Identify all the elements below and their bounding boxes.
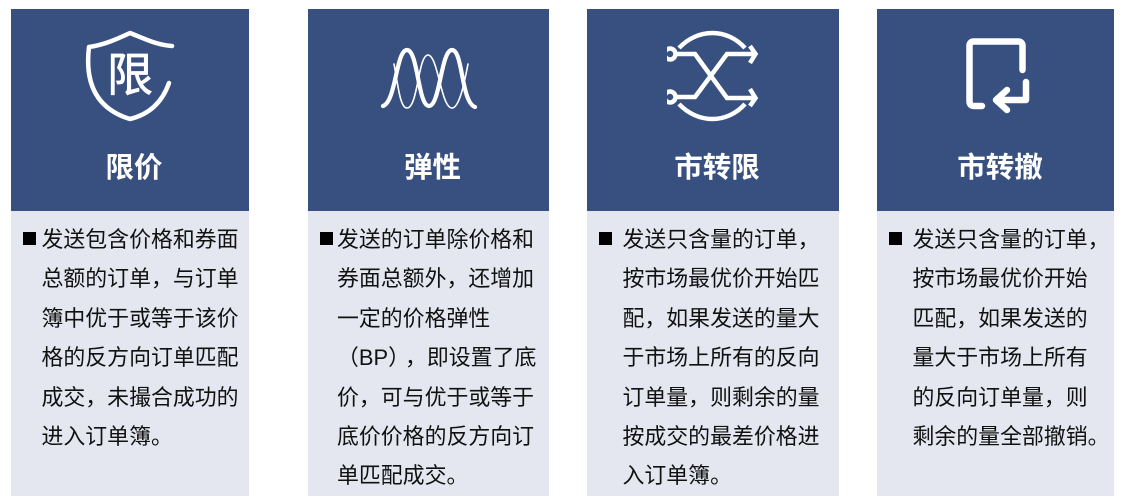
description: 弹性: （BP），即设置了底 [337, 345, 536, 370]
description: 市转撤: 剩余的量全部撤销。 [912, 424, 1110, 449]
description: 限价: 簿中优于或等于该价 [42, 306, 239, 331]
panel: 市转撤 [877, 9, 1114, 496]
heading: 市转撤: 市转撤 [957, 152, 1043, 184]
description: 限价: 发送包含价格和券面 [42, 227, 239, 252]
heading: 市转限: 市转限 [674, 152, 760, 184]
description: 市转限: 入订单簿。 [622, 463, 732, 488]
description: 弹性: 价，可与优于或等于 [337, 385, 534, 410]
description: 市转撤: 发送只含量的订单， [912, 227, 1110, 252]
description: 市转限: 发送只含量的订单， [622, 227, 820, 252]
bullet [599, 232, 612, 245]
icon: return arrow in frame [966, 38, 1030, 114]
description: 限价 [42, 227, 239, 449]
panel: 限价 [11, 9, 249, 496]
icon: overlapping waves [380, 48, 478, 110]
description: 市转撤: 按市场最优价开始 [912, 266, 1088, 291]
description: 限价: 进入订单簿。 [42, 424, 173, 449]
text panel: 市转限 [587, 211, 839, 496]
description: 市转限 [622, 227, 820, 488]
description: 市转撤: 匹配，如果发送的 [912, 306, 1088, 331]
description: 限价: 总额的订单，与订单 [42, 266, 239, 291]
text panel: 市转撤 [877, 211, 1114, 496]
description: 市转限: 按市场最优价开始匹 [622, 266, 820, 291]
description: 市转撤 [912, 227, 1110, 449]
bullet [889, 232, 902, 245]
description: 市转限: 于市场上所有的反向 [622, 345, 820, 370]
panel: 弹性 [308, 9, 549, 496]
icon: shield with 限: 限 [107, 49, 153, 101]
panel: 市转限 [587, 9, 839, 496]
description: 弹性 [337, 227, 536, 488]
description: 弹性: 券面总额外，还增加 [337, 266, 534, 291]
description: 弹性: 单匹配成交。 [337, 463, 468, 488]
header background: 限价 [11, 9, 249, 211]
text panel: 限价 [11, 211, 249, 496]
text panel: 弹性 [308, 211, 549, 496]
header background: 弹性 [308, 9, 549, 211]
bullet [320, 232, 333, 245]
description: 弹性: 一定的价格弹性 [337, 306, 490, 331]
description: 市转撤: 的反向订单量，则 [912, 385, 1088, 410]
icon: shield with 限 [86, 30, 174, 122]
heading: 限价: 限价 [105, 152, 162, 184]
description: 弹性: 发送的订单除价格和 [337, 227, 534, 252]
description: 市转限: 按成交的最差价格进 [622, 424, 820, 449]
header background: 市转限 [587, 9, 839, 211]
description: 弹性: 底价价格的反方向订 [337, 424, 534, 449]
description: 市转限: 订单量，则剩余的量 [622, 385, 820, 410]
description: 限价: 成交，未撮合成功的 [42, 385, 239, 410]
description: 市转限: 配，如果发送的量大 [622, 306, 820, 331]
bullet [23, 232, 36, 245]
description: 市转撤: 量大于市场上所有 [912, 345, 1088, 370]
icon: crossing arrows [667, 30, 758, 122]
description: 限价: 格的反方向订单匹配 [42, 345, 239, 370]
header background: 市转撤 [877, 9, 1114, 211]
heading: 弹性: 弹性 [404, 152, 461, 184]
